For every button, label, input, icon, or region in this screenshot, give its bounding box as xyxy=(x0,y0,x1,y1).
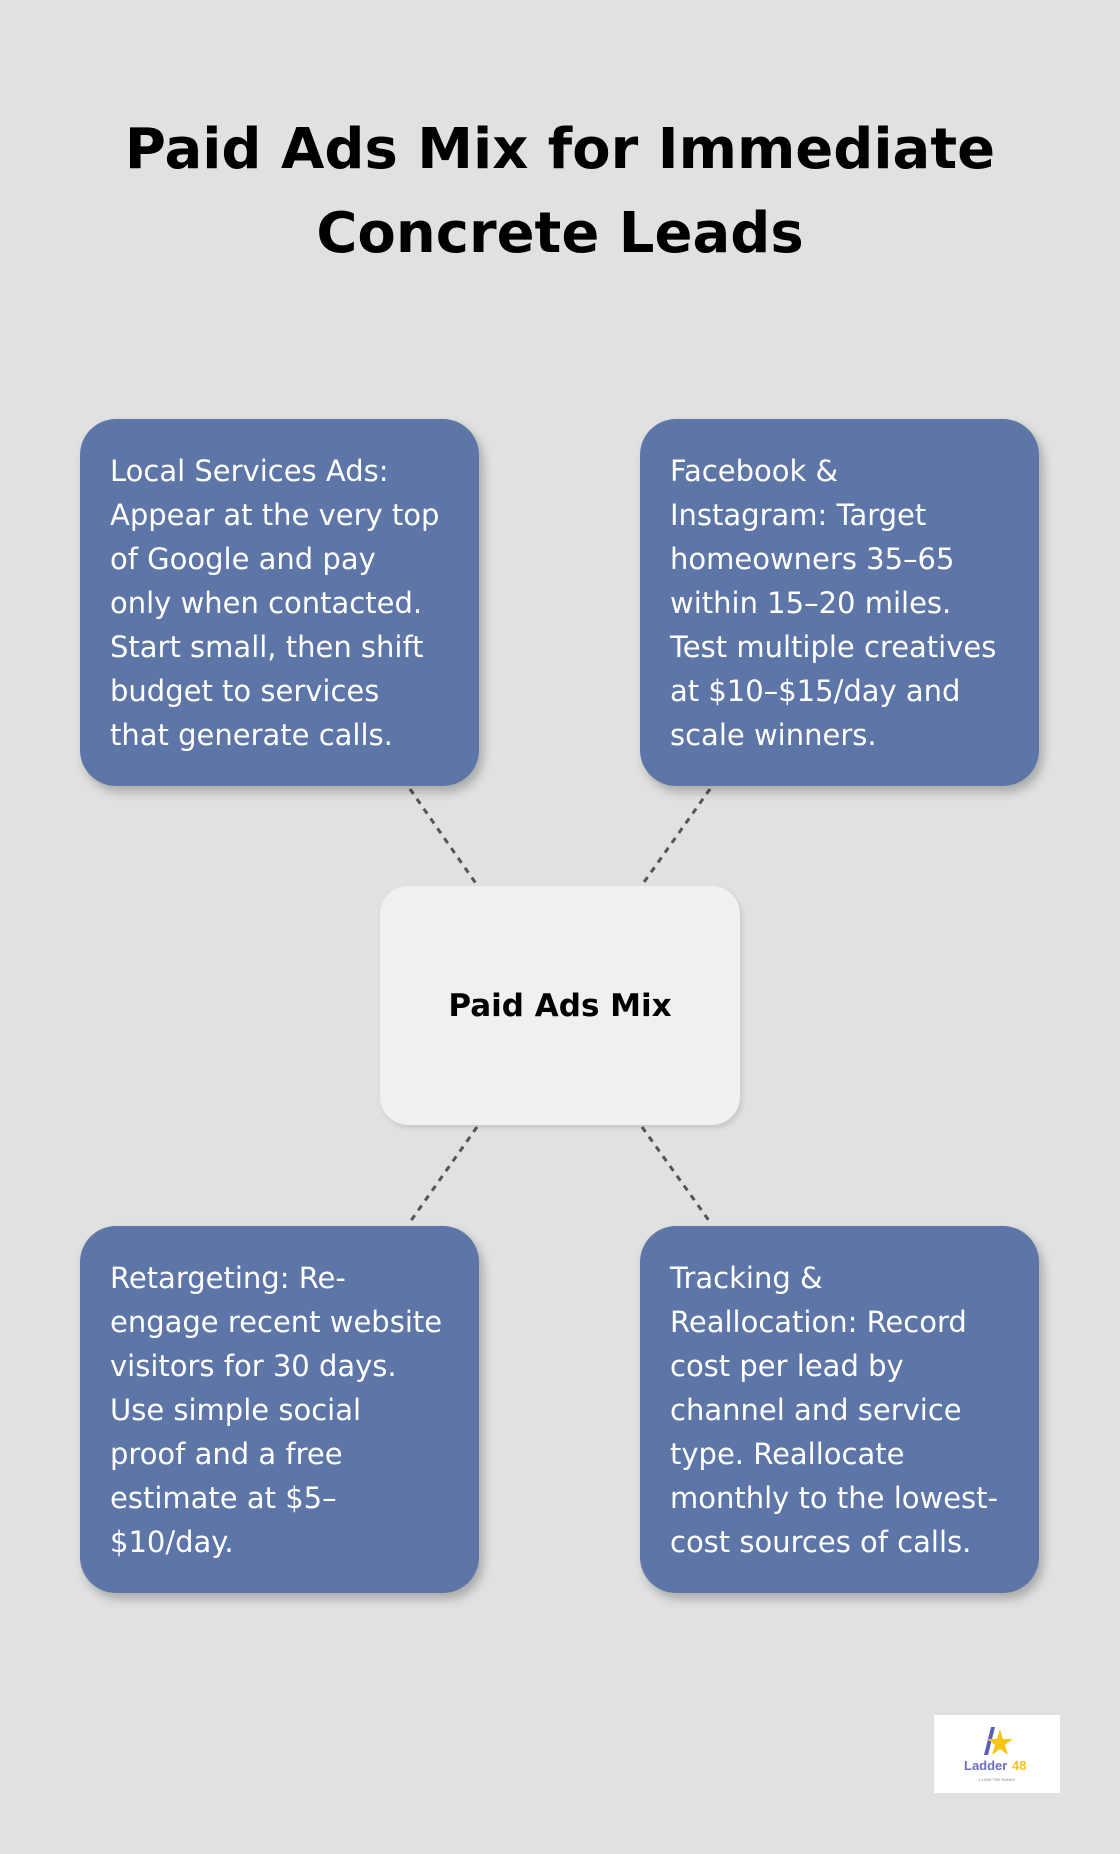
panel: facebook & instagram: within 15–20 miles. xyxy=(670,586,951,620)
panel: retargeting xyxy=(80,1226,479,1593)
panel: retargeting: $10/day. xyxy=(110,1525,234,1559)
title: Paid Ads Mix for Immediate xyxy=(125,117,995,182)
panel: local services ads: Start small, then shift xyxy=(110,630,424,664)
title: Concrete Leads xyxy=(316,201,804,266)
panel: local services ads xyxy=(80,419,479,786)
logo: 48 xyxy=(1012,1758,1026,1773)
panel: facebook & instagram: at $10–$15/day and xyxy=(670,674,960,708)
panel: retargeting: Use simple social xyxy=(110,1393,361,1427)
panel: local services ads: of Google and pay xyxy=(110,542,376,576)
logo: CLIMB THE RANKS xyxy=(979,1777,1015,1782)
logo xyxy=(934,1715,1060,1793)
panel: local services ads: only when contacted. xyxy=(110,586,422,620)
panel: tracking & reallocation xyxy=(640,1226,1039,1593)
panel: facebook & instagram xyxy=(640,419,1039,786)
panel: facebook & instagram: Facebook & xyxy=(670,454,838,488)
panel: tracking & reallocation: type. Reallocate xyxy=(670,1437,904,1471)
panel: retargeting: visitors for 30 days. xyxy=(110,1349,397,1383)
panel: facebook & instagram: homeowners 35–65 xyxy=(670,542,954,576)
panel: retargeting: engage recent website xyxy=(110,1305,442,1339)
center node: Paid Ads Mix xyxy=(448,988,672,1024)
panel: tracking & reallocation: Tracking & xyxy=(670,1261,823,1295)
panel: tracking & reallocation: cost sources of calls. xyxy=(670,1525,971,1559)
panel: tracking & reallocation: monthly to the lowest- xyxy=(670,1481,998,1515)
panel: retargeting: proof and a free xyxy=(110,1437,343,1471)
center node xyxy=(380,886,740,1125)
title xyxy=(125,117,995,266)
panel: retargeting: Retargeting: Re- xyxy=(110,1261,346,1295)
logo: Ladder xyxy=(964,1758,1007,1773)
panel: local services ads: budget to services xyxy=(110,674,379,708)
panel: local services ads: that generate calls. xyxy=(110,718,393,752)
panel: local services ads: Appear at the very top xyxy=(110,498,439,532)
panel: facebook & instagram: Instagram: Target xyxy=(670,498,926,532)
panel: facebook & instagram: scale winners. xyxy=(670,718,877,752)
panel: tracking & reallocation: channel and service xyxy=(670,1393,962,1427)
panel: tracking & reallocation: Reallocation: Record xyxy=(670,1305,967,1339)
panel: facebook & instagram: Test multiple creatives xyxy=(670,630,996,664)
panel: tracking & reallocation: cost per lead by xyxy=(670,1349,904,1383)
panel: retargeting: estimate at $5– xyxy=(110,1481,337,1515)
panel: local services ads: Local Services Ads: xyxy=(110,454,389,488)
